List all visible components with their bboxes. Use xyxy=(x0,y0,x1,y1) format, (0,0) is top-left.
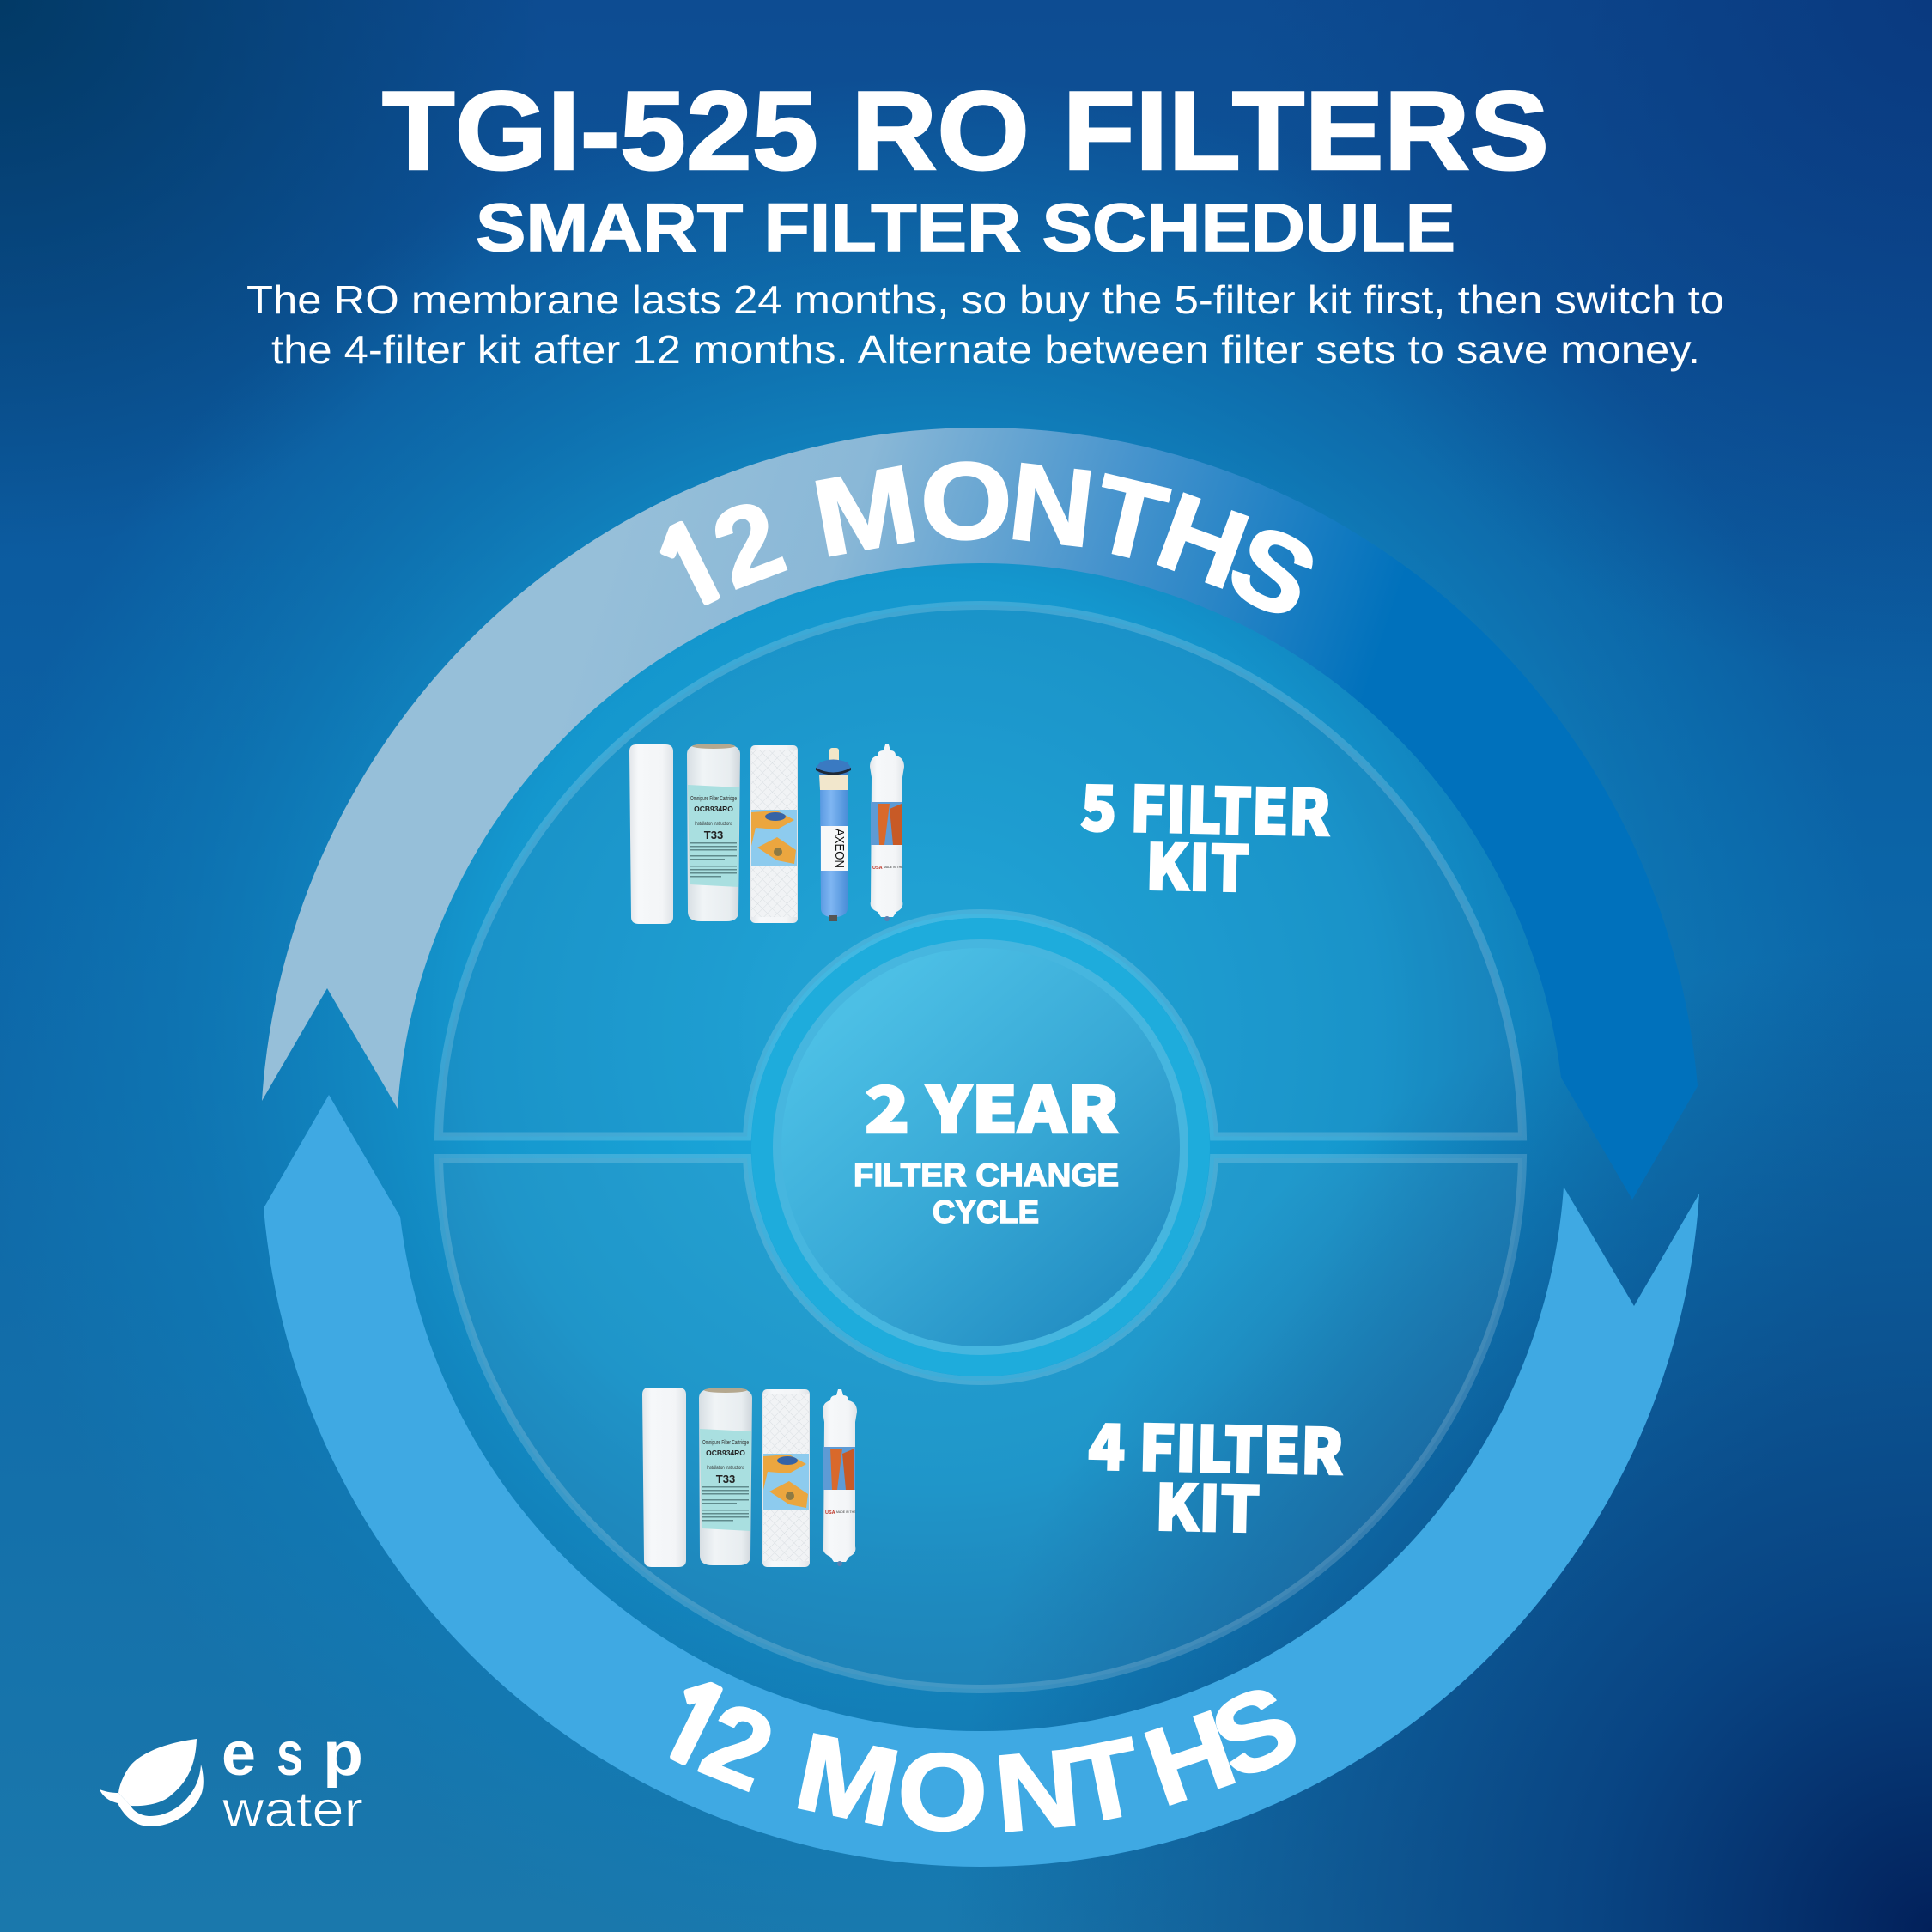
carbon block filter with label xyxy=(699,1388,752,1565)
label: top 12 months: O xyxy=(919,440,1013,563)
label: top 12 months: 1 xyxy=(640,505,747,630)
label: top 12 months: T xyxy=(1082,452,1177,586)
image: 5 filter kit cartridges xyxy=(629,744,904,924)
wordmark: e xyxy=(222,1720,256,1789)
text: filter change cycle: FILTER CHANGE xyxy=(854,1157,1119,1193)
label: top 12 months xyxy=(640,440,1335,643)
carbon filter with orange label xyxy=(762,1389,810,1567)
text: 4 filter kit xyxy=(1086,1397,1345,1552)
sediment filter xyxy=(629,744,673,924)
carbon block filter with label: Installation Instructions xyxy=(695,821,732,827)
label: bottom 12 months: O xyxy=(894,1728,991,1856)
text: 4 filter kit: 4 FILTER xyxy=(1088,1397,1345,1493)
label: bottom 12 months: N xyxy=(990,1726,1084,1855)
label: bottom 12 months: 1 xyxy=(639,1662,746,1789)
wordmark xyxy=(222,1720,363,1838)
label: bottom 12 months xyxy=(639,1661,1315,1856)
carbon block filter with label: T33 xyxy=(716,1473,735,1485)
description: The RO membrane lasts 24 months, so buy the 5-filter kit first, then switch to xyxy=(246,277,1724,322)
label: bottom 12 months: T xyxy=(1060,1715,1151,1848)
description: the 4-filter kit after 12 months. Alternate between filter sets to save money. xyxy=(271,327,1700,372)
text: filter change cycle: CYCLE xyxy=(933,1194,1039,1230)
carbon block filter with label: Omnipure Filter Cartridge xyxy=(702,1440,749,1446)
description xyxy=(246,277,1724,372)
carbon block filter with label xyxy=(687,744,740,921)
inline post filter xyxy=(823,1389,857,1566)
text: 5 filter kit: 5 FILTER xyxy=(1080,758,1332,854)
title: TGI-525 RO FILTERS xyxy=(382,68,1549,193)
subtitle: SMART FILTER SCHEDULE xyxy=(476,189,1455,265)
carbon block filter with label: Omnipure Filter Cartridge xyxy=(690,796,737,802)
sediment filter xyxy=(642,1388,686,1567)
label: top 12 months: H xyxy=(1143,469,1263,612)
wordmark: s xyxy=(276,1720,303,1789)
panel: lower half ring xyxy=(439,1158,1522,1689)
wordmark: p xyxy=(323,1720,363,1789)
panel: upper half ring xyxy=(439,605,1522,1137)
carbon block filter with label: OCB934RO xyxy=(694,805,733,813)
text: 4 filter kit: KIT xyxy=(1154,1458,1261,1551)
inline post filter: USA xyxy=(872,866,883,871)
inline post filter: MADE IN THE xyxy=(884,866,903,869)
label: top 12 months: N xyxy=(1004,440,1100,570)
inline post filter xyxy=(870,744,904,921)
panel: centre circle xyxy=(751,918,1210,1376)
icon: leaf xyxy=(100,1739,204,1826)
label: top 12 months: S xyxy=(1212,500,1335,643)
logo: esp water xyxy=(100,1720,363,1838)
RO membrane xyxy=(816,748,851,921)
inline post filter: USA xyxy=(825,1510,835,1516)
wordmark: water xyxy=(222,1782,363,1838)
text: 5 filter kit xyxy=(1078,758,1332,912)
label: bottom 12 months: 2 xyxy=(686,1679,789,1814)
label: bottom 12 months: H xyxy=(1131,1687,1249,1829)
label: top 12 months: 2 xyxy=(697,477,799,612)
label: bottom 12 months: S xyxy=(1194,1661,1315,1803)
carbon block filter with label: OCB934RO xyxy=(706,1449,745,1457)
text: 2 year: 2 YEAR xyxy=(865,1060,1119,1151)
inline post filter: MADE IN THE xyxy=(836,1510,856,1514)
arrow: top 12 months xyxy=(262,428,1698,1200)
label: top 12 months: M xyxy=(805,442,927,580)
carbon block filter with label: T33 xyxy=(704,829,723,841)
image: 4 filter kit cartridges xyxy=(642,1388,857,1567)
text: filter change cycle xyxy=(854,1157,1119,1230)
carbon filter with orange label xyxy=(750,745,798,923)
carbon block filter with label: Installation Instructions xyxy=(707,1465,744,1471)
arrow: bottom 12 months xyxy=(264,1095,1699,1867)
text: 5 filter kit: KIT xyxy=(1145,817,1250,910)
RO membrane: AXEON xyxy=(832,829,847,868)
label: bottom 12 months: M xyxy=(787,1710,909,1850)
